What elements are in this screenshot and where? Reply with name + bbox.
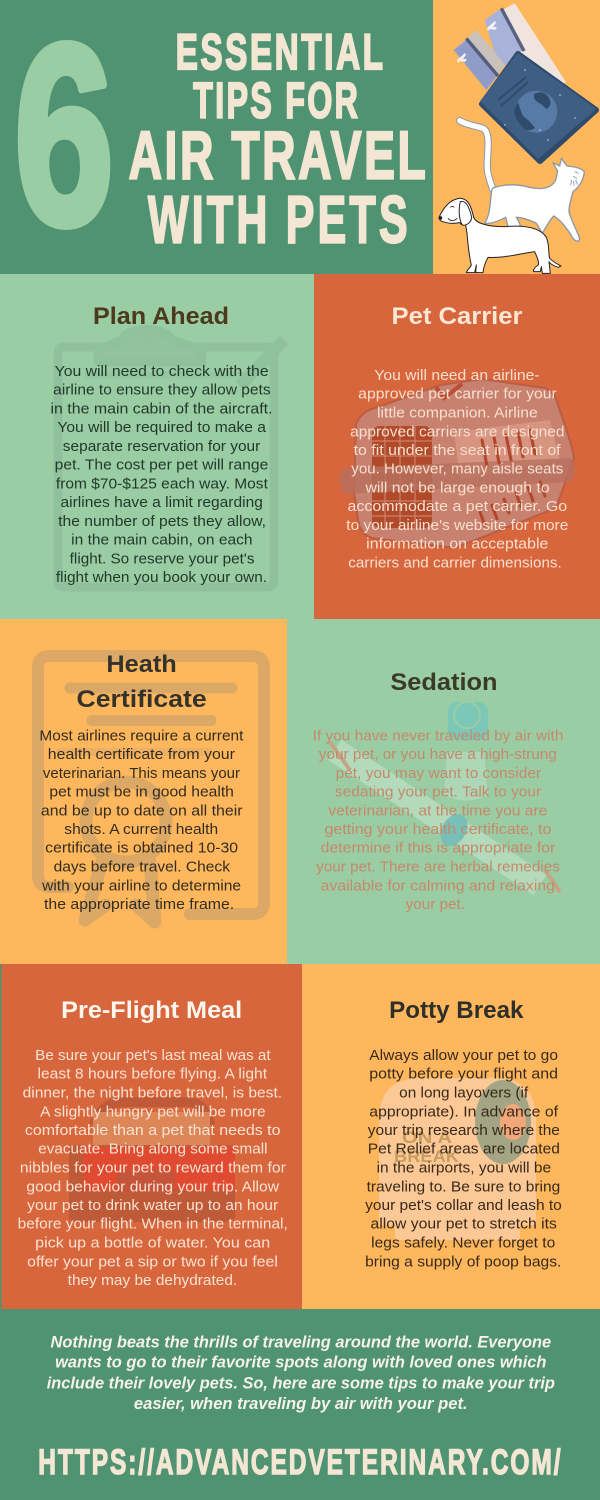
body text: pet must be in good health — [49, 784, 234, 801]
body text: You will be required to make a — [57, 419, 267, 436]
body text: in the main cabin, on each — [71, 532, 253, 549]
closing statement: wants to go to their favorite spots along with loved ones which — [55, 1354, 546, 1372]
body text: veterinarian. This means your — [43, 765, 240, 782]
heading: Pet Carrier — [392, 303, 522, 330]
body text: shots. A current health — [64, 821, 218, 838]
body text: pet, you may want to consider — [336, 765, 541, 782]
body text: sedating your pet. Talk to your — [335, 784, 541, 801]
body text: your pet. — [406, 896, 465, 913]
icon: pet carrier watermark — [340, 379, 575, 548]
body text: in the airports, you will be — [377, 1159, 551, 1176]
body text: A slightly hungry pet will be more — [40, 1103, 266, 1120]
icon: on a break sign watermark — [379, 1078, 536, 1240]
heading: Pre-Flight Meal — [61, 997, 242, 1024]
icon: clipboard watermark — [58, 330, 284, 587]
body text — [50, 363, 272, 586]
body text: your trip research where the — [368, 1122, 560, 1139]
body text: accommodate a pet carrier. Go — [348, 498, 567, 515]
body text: will not be large enough to — [364, 479, 550, 496]
body text: appropriate). In advance of — [369, 1103, 559, 1120]
body text: to fit under the seat in front of — [354, 442, 561, 459]
body text: and be up to date on all their — [41, 802, 243, 819]
body text: You will need to check with the — [55, 363, 269, 380]
title — [129, 24, 426, 257]
icon: plane tickets — [454, 3, 566, 100]
header panel — [0, 0, 433, 278]
icon: certificate watermark — [38, 656, 264, 922]
body text: days before travel. Check — [54, 858, 231, 875]
body text: carriers and carrier dimensions. — [348, 554, 562, 571]
body text: certificate is obtained 10-30 — [45, 840, 238, 857]
icon: lunch bag watermark — [69, 1102, 235, 1222]
body text: dinner, the night before travel, is best. — [23, 1085, 282, 1102]
body text: comfortable than a pet that needs to — [25, 1122, 281, 1139]
body text: your pet, or you have a high-strung — [319, 746, 557, 763]
body text: the appropriate time frame. — [44, 896, 234, 913]
body text: your pet's collar and leash to — [365, 1197, 562, 1214]
heading — [76, 651, 207, 713]
body text: Be sure your pet's last meal was at — [35, 1047, 271, 1064]
icon: white cat — [460, 121, 584, 241]
body text: approved pet carrier for your — [358, 386, 557, 403]
body text: before your flight. When in the terminal, — [18, 1216, 288, 1233]
big number six: 6 — [14, 0, 114, 278]
panel: sedation — [287, 619, 600, 964]
body text: available for calming and relaxing — [321, 877, 555, 894]
body text: approved carriers are designed — [350, 423, 564, 440]
body text — [365, 1047, 562, 1270]
body text: health certificate from your — [48, 746, 235, 763]
closing statement: easier, when traveling by air with your pet. — [134, 1395, 468, 1413]
body text: pet. The cost per pet will range — [55, 457, 268, 474]
website url: HTTPS://ADVANCEDVETERINARY.COM/ — [38, 1444, 561, 1482]
title: AIR TRAVEL — [129, 118, 426, 194]
body text: legs safely. Never forget to — [371, 1234, 555, 1251]
body text: least 8 hours before flying. A light — [38, 1066, 268, 1083]
header illustration panel — [433, 0, 600, 274]
body text: the number of pets they allow, — [58, 513, 266, 530]
body text: getting your health certificate, to — [324, 821, 551, 838]
panel: pre-flight meal — [2, 964, 302, 1309]
body text: with your airline to determine — [41, 877, 241, 894]
body text: flight. So reserve your pet's — [70, 550, 254, 567]
body text: Always allow your pet to go — [369, 1047, 558, 1064]
body text: offer your pet a sip or two if you feel — [27, 1253, 278, 1270]
body text: determine if this is appropriate for — [321, 840, 555, 857]
heading: Heath — [106, 651, 177, 678]
body text: pick up a bottle of water. You can — [35, 1234, 270, 1251]
body text: Most airlines require a current — [39, 727, 244, 744]
body text: separate reservation for your — [63, 438, 260, 455]
heading: Sedation — [390, 669, 498, 696]
body text: potty before your flight and — [369, 1066, 558, 1083]
icon: white dachshund dog — [438, 198, 561, 273]
body text: in the main cabin of the aircraft. — [50, 400, 272, 417]
closing statement — [47, 1333, 555, 1413]
body text: on long layovers (if — [399, 1085, 529, 1102]
closing statement: Nothing beats the thrills of traveling around the world. Everyone — [50, 1333, 551, 1351]
body text: your pet to drink water up to an hour — [27, 1197, 278, 1214]
body text: If you have never traveled by air with — [313, 727, 563, 744]
body text: veterinarian, at the time you are — [328, 802, 547, 819]
body text: information on acceptable — [366, 536, 548, 553]
icon: on a break sign watermark: ON A — [402, 1128, 452, 1147]
body text: Pet Relief areas are located — [368, 1141, 560, 1158]
title: TIPS FOR — [193, 72, 358, 128]
body text: your pet. There are herbal remedies — [316, 858, 560, 875]
panel: pet carrier — [314, 274, 600, 619]
panel: plan ahead — [0, 274, 314, 619]
body text — [346, 367, 568, 571]
panel: footer — [0, 1309, 600, 1500]
body text — [313, 727, 563, 913]
body text: to your airline's website for more — [346, 517, 568, 534]
icon: on a break sign watermark: BREAK — [394, 1147, 460, 1166]
title: WITH PETS — [148, 182, 408, 257]
body text: You will need an airline- — [374, 367, 540, 384]
body text — [18, 1047, 288, 1289]
panel: health certificate — [0, 619, 287, 964]
heading: Plan Ahead — [93, 303, 229, 330]
body text: nibbles for your pet to reward them for — [20, 1159, 286, 1176]
body text: airlines have a limit regarding — [60, 494, 263, 511]
body text: traveling to. Be sure to bring — [367, 1178, 560, 1195]
closing statement: include their lovely pets. So, here are some tips to make your trip — [47, 1374, 555, 1392]
body text — [39, 727, 244, 913]
panel: potty break — [302, 964, 600, 1309]
body text: bring a supply of poop bags. — [365, 1253, 561, 1270]
body text: they may be dehydrated. — [68, 1272, 237, 1289]
icon: syringe and bottle watermark — [330, 702, 560, 892]
body text: flight when you book your own. — [56, 569, 267, 586]
heading: Potty Break — [389, 997, 524, 1024]
body text: airline to ensure they allow pets — [53, 382, 271, 399]
heading: Certificate — [76, 686, 207, 713]
body text: from $70-$125 each way. Most — [56, 475, 269, 492]
body text: good behavior during your trip. Allow — [26, 1178, 279, 1195]
body text: evacuate. Bring along some small — [38, 1141, 267, 1158]
body text: little companion. Airline — [377, 404, 538, 421]
body text: you. However, many aisle seats — [351, 461, 563, 478]
icon: passport — [482, 54, 596, 161]
title: ESSENTIAL — [176, 24, 383, 80]
body text: allow your pet to stretch its — [370, 1216, 557, 1233]
